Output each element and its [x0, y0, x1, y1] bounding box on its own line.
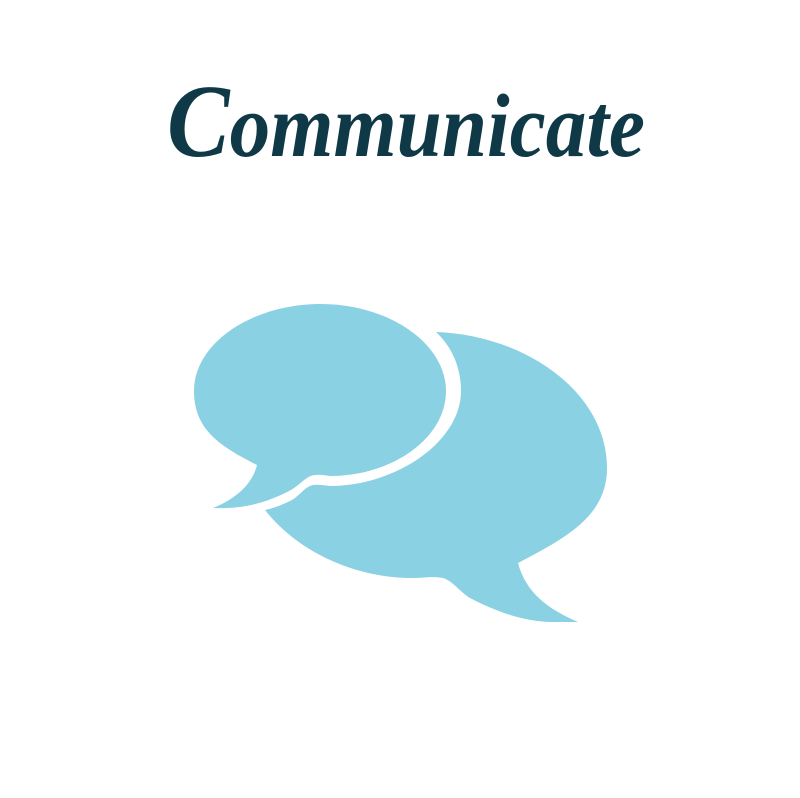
icon: small speech bubble	[194, 304, 446, 508]
title: Communicate	[167, 64, 645, 179]
icon: large speech bubble	[265, 332, 607, 622]
icon: speech bubbles	[194, 304, 607, 622]
